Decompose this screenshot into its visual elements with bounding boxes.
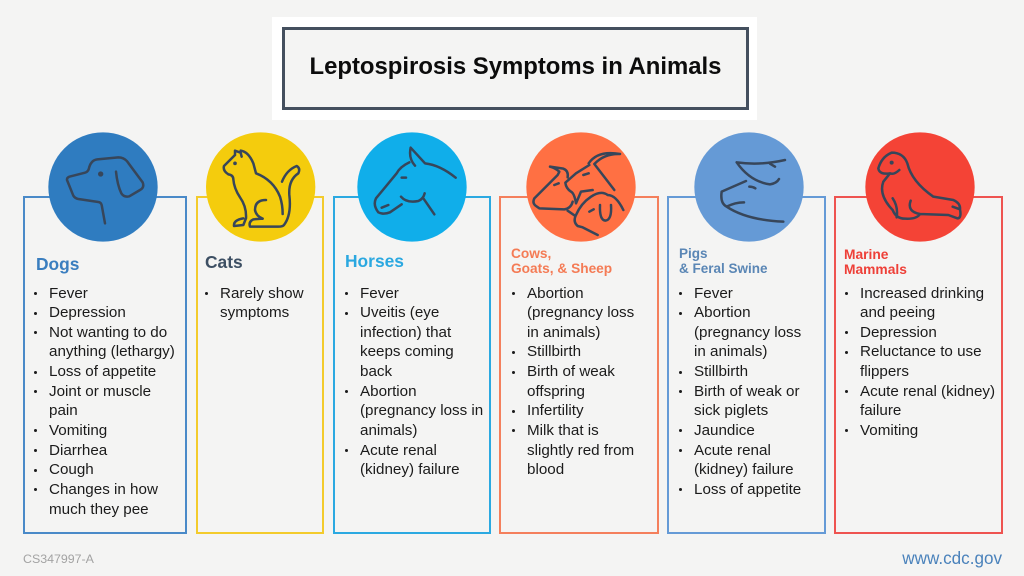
symptom list: dogs: pain	[49, 402, 78, 419]
symptom list: cows, goats and sheep: in animals)	[527, 324, 600, 341]
heading: pigs and feral swine	[679, 246, 768, 276]
heading: horses: Horses	[345, 251, 404, 271]
icon: pig	[694, 132, 804, 242]
symptom list: cows, goats and sheep: offspring	[527, 383, 585, 400]
title	[272, 17, 757, 120]
symptom list: dogs: Changes in how	[49, 481, 158, 498]
footer: website: www.cdc.gov	[902, 549, 1002, 568]
panel: marine mammals	[834, 132, 1003, 534]
symptom list: pigs and feral swine: sick piglets	[694, 402, 768, 419]
symptom list: pigs and feral swine: Abortion	[694, 304, 751, 321]
title: Leptospirosis Symptoms in Animals	[310, 53, 721, 80]
symptom list: pigs and feral swine: Stillbirth	[694, 363, 748, 380]
heading: marine mammals	[844, 247, 907, 277]
symptom list: horses: keeps coming	[360, 343, 454, 360]
heading: pigs and feral swine: & Feral Swine	[679, 261, 768, 276]
symptom list: marine mammals: Reluctance to use	[860, 343, 982, 360]
symptom list: dogs: anything (lethargy)	[49, 343, 175, 360]
symptom list: horses: back	[360, 363, 392, 380]
symptom list: horses: animals)	[360, 422, 417, 439]
symptom list: pigs and feral swine: Birth of weak or	[694, 383, 800, 400]
symptom list: pigs and feral swine	[679, 284, 801, 498]
symptom list: marine mammals: flippers	[860, 363, 909, 380]
symptom list: dogs: Vomiting	[49, 422, 107, 439]
icon: cow, goat and sheep	[526, 132, 636, 242]
symptom list: pigs and feral swine: Fever	[694, 284, 733, 302]
symptom list: pigs and feral swine: Acute renal	[694, 442, 771, 459]
symptom list: dogs: Not wanting to do	[49, 324, 167, 341]
heading: cows, goats and sheep: Cows,	[511, 246, 551, 260]
symptom list: dogs: Loss of appetite	[49, 363, 156, 380]
symptom list: dogs: Cough	[49, 461, 94, 478]
heading: cats: Cats	[205, 252, 243, 272]
symptom list: marine mammals: Acute renal (kidney)	[860, 383, 995, 400]
symptom list: pigs and feral swine: (kidney) failure	[694, 461, 794, 478]
heading: pigs and feral swine: Pigs	[679, 246, 708, 261]
symptom list: cows, goats and sheep: Birth of weak	[527, 363, 615, 380]
symptom list: cows, goats and sheep	[512, 284, 634, 478]
symptom list: cows, goats and sheep: slightly red from	[527, 442, 634, 459]
icon: dog	[48, 132, 158, 242]
symptom list: horses	[345, 284, 483, 478]
symptom list: horses: Uveitis (eye	[360, 304, 439, 321]
symptom list: cows, goats and sheep: Stillbirth	[527, 343, 581, 360]
panel: dogs	[23, 132, 187, 534]
panel: cats	[196, 132, 324, 534]
symptom list: horses: (kidney) failure	[360, 461, 460, 478]
symptom list: cats	[205, 284, 304, 321]
symptom list: cows, goats and sheep: Milk that is	[527, 422, 599, 439]
symptom list: pigs and feral swine: Loss of appetite	[694, 481, 801, 498]
symptom list: dogs	[34, 284, 175, 518]
symptom list: horses: Abortion	[360, 383, 417, 400]
icon: horse	[357, 132, 467, 242]
symptom list: cats: symptoms	[220, 304, 289, 321]
symptom list: dogs: Depression	[49, 304, 126, 321]
symptom list: horses: Acute renal	[360, 442, 437, 459]
symptom list: pigs and feral swine: Jaundice	[694, 422, 755, 439]
heading: cows, goats and sheep: Goats, & Sheep	[511, 260, 612, 276]
heading: marine mammals: Marine	[844, 247, 888, 262]
symptom list: marine mammals: Depression	[860, 324, 937, 341]
symptom list: dogs: Fever	[49, 284, 88, 302]
panel: pigs and feral swine	[667, 132, 826, 534]
panel: horses	[333, 132, 491, 534]
footer: document code: CS347997-A	[23, 552, 94, 566]
icon: cat	[206, 132, 316, 242]
panel: cows, goats and sheep	[499, 132, 659, 534]
symptom list: marine mammals: Vomiting	[860, 422, 918, 439]
symptom list: dogs: much they pee	[49, 501, 149, 518]
icon: seal	[865, 132, 975, 242]
heading: marine mammals: Mammals	[844, 262, 907, 277]
symptom list: dogs: Joint or muscle	[49, 383, 151, 400]
symptom list: cows, goats and sheep: (pregnancy loss	[527, 304, 634, 321]
symptom list: cows, goats and sheep: Infertility	[527, 402, 584, 419]
symptom list: horses: Fever	[360, 284, 399, 302]
symptom list: horses: infection) that	[360, 324, 451, 341]
symptom list: cows, goats and sheep: blood	[527, 461, 564, 478]
symptom list: marine mammals	[845, 284, 995, 439]
symptom list: pigs and feral swine: in animals)	[694, 343, 767, 360]
symptom list: marine mammals: Increased drinking	[860, 284, 984, 302]
symptom list: horses: (pregnancy loss in	[360, 402, 483, 419]
symptom list: marine mammals: and peeing	[860, 304, 935, 321]
symptom list: pigs and feral swine: (pregnancy loss	[694, 324, 801, 341]
symptom list: marine mammals: failure	[860, 402, 901, 419]
symptom list: cats: Rarely show	[220, 284, 304, 302]
heading: cows, goats and sheep	[511, 246, 612, 276]
heading: dogs: Dogs	[36, 254, 79, 274]
symptom list: cows, goats and sheep: Abortion	[527, 284, 584, 302]
symptom list: dogs: Diarrhea	[49, 442, 107, 459]
